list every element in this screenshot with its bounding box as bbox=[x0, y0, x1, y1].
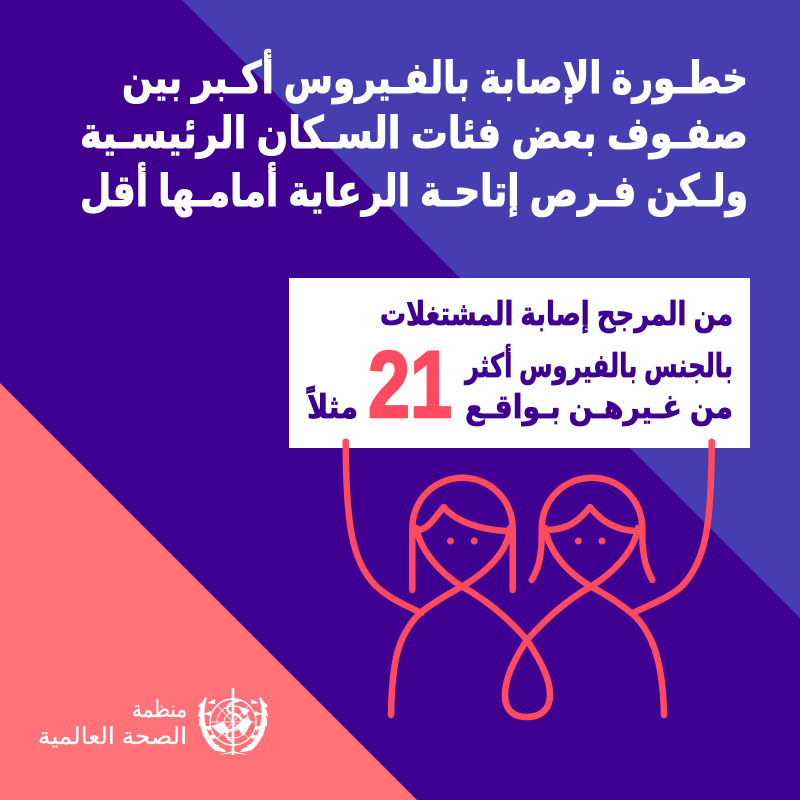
central ribbon with loop bbox=[416, 528, 638, 717]
callout text: من غـيرهـن بـواقـع bbox=[465, 388, 733, 427]
panel: blue diagonal bbox=[182, 0, 800, 618]
emblem laurels bbox=[198, 697, 268, 755]
callout text: مثلاً bbox=[306, 385, 358, 425]
right arm bbox=[632, 442, 712, 614]
illustration: two women bbox=[346, 442, 712, 717]
left body and face ribbon bbox=[391, 528, 510, 715]
number 21: 21 bbox=[368, 332, 452, 438]
emblem continents bbox=[211, 706, 252, 736]
emblem staff and serpent bbox=[227, 688, 242, 755]
logo: WHO emblem bbox=[198, 688, 268, 755]
left woman fringe bbox=[418, 507, 507, 531]
title bbox=[80, 49, 748, 217]
logo text bbox=[38, 696, 187, 749]
left woman eyes bbox=[447, 538, 478, 544]
logo text: منظمة bbox=[132, 696, 187, 722]
right woman fringe bbox=[548, 507, 635, 531]
right woman hair bbox=[532, 478, 652, 580]
left woman hair bbox=[412, 478, 513, 590]
callout panel bbox=[289, 278, 750, 448]
logo text: الصحة العالمية bbox=[38, 723, 187, 749]
right woman eyes bbox=[575, 538, 606, 544]
callout text bbox=[306, 295, 733, 427]
panel: salmon diagonal bbox=[0, 383, 417, 800]
right body and face ribbon bbox=[545, 528, 664, 715]
left arm bbox=[346, 442, 422, 613]
